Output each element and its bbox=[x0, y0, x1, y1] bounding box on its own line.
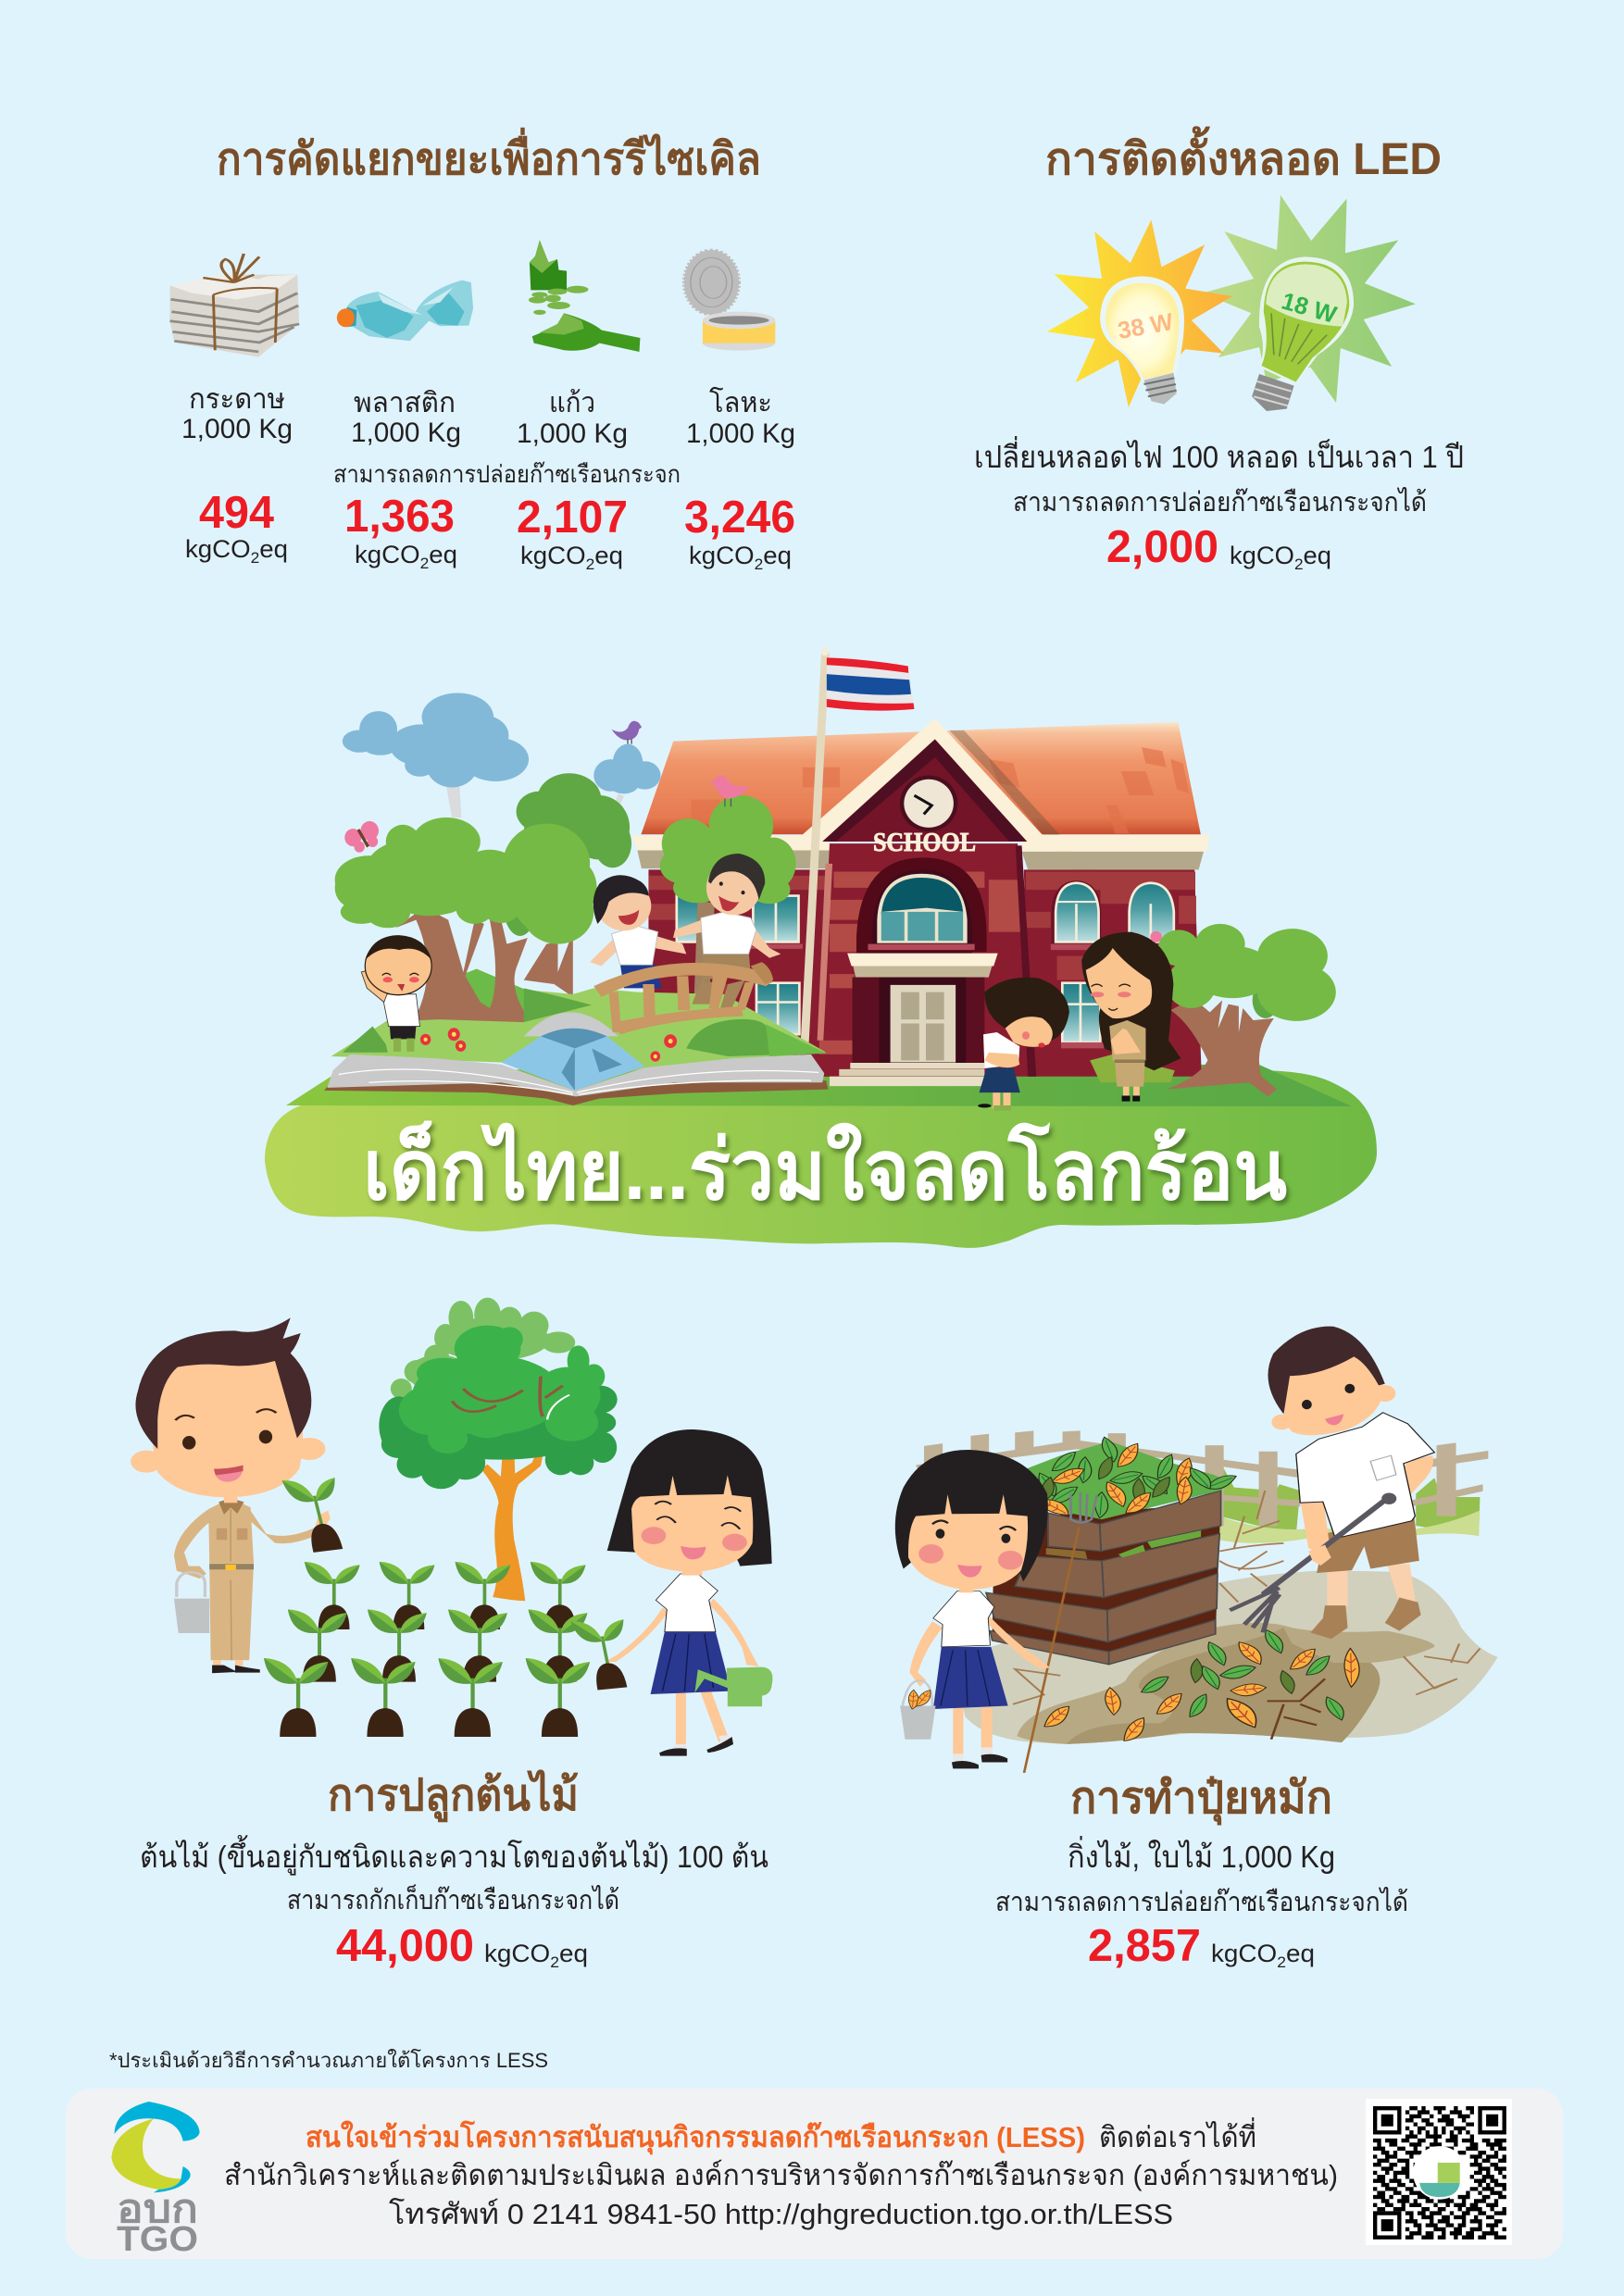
clouds bbox=[343, 693, 661, 817]
heading: tree planting: การปลูกต้นไม้ bbox=[328, 1768, 579, 1823]
icon: yellow 38W bulb bbox=[1047, 219, 1232, 407]
child: girl on bridge bbox=[590, 875, 686, 988]
unit: 2,000: eq bbox=[1304, 542, 1331, 569]
ground and soil bbox=[962, 1570, 1498, 1744]
item: paper: 494 bbox=[199, 488, 274, 538]
caption: carbon storage: สามารถกักเก็บก๊าซเรือนกระจกได้ bbox=[287, 1883, 619, 1915]
item: glass: แก้ว bbox=[549, 388, 595, 418]
caption: recycling reduction: สามารถลดการปล่อยก๊าซเรือนกระจก bbox=[333, 460, 681, 488]
item: glass: eq bbox=[594, 542, 623, 569]
character: girl with pitchfork bbox=[895, 1450, 1097, 1773]
illustration: composting bbox=[895, 1327, 1498, 1773]
footnote: *ประเมินด้วยวิธีการคำนวณภายใต้โครงการ LESS bbox=[109, 2049, 548, 2072]
heading: composting: การทำปุ๋ยหมัก bbox=[1070, 1774, 1332, 1826]
child: bowing girl bbox=[978, 978, 1069, 1111]
icon: crushed plastic bottle bbox=[337, 281, 473, 341]
item: paper: 1,000 Kg bbox=[181, 414, 293, 444]
panel: tree planting bbox=[131, 1298, 772, 1971]
item: paper: 2 bbox=[251, 549, 259, 567]
item: plastic bbox=[344, 388, 461, 572]
item: paper: eq bbox=[259, 535, 288, 563]
text: 100 bulbs one year: เปลี่ยนหลอดไฟ 100 หลอด เป็นเวลา 1 ปี bbox=[974, 436, 1464, 474]
unit: 44,000: kgCO bbox=[484, 1940, 548, 1967]
QR code bbox=[1366, 2099, 1512, 2245]
panel: contact footer bbox=[66, 2089, 1563, 2259]
item: plastic: พลาสติก bbox=[354, 388, 456, 418]
value: 44,000: 44,000 bbox=[336, 1921, 474, 1971]
unit: 44,000: eq bbox=[559, 1940, 588, 1967]
illustration: tree planting bbox=[131, 1298, 772, 1756]
item: glass: kgCO bbox=[520, 542, 584, 569]
banner title: เด็กไทย...ร่วมใจลดโลกร้อน bbox=[363, 1119, 1287, 1217]
fallen leaves bbox=[1041, 1628, 1361, 1744]
text: twigs and leaves: กิ่งไม้, ใบไม้ 1,000 Kg bbox=[1068, 1836, 1335, 1874]
unit: 2,857: kgCO bbox=[1211, 1940, 1275, 1967]
value: 2,857: 2,857 bbox=[1088, 1921, 1201, 1971]
item: metal: 3,246 bbox=[684, 493, 795, 543]
item: plastic: 1,363 bbox=[344, 492, 455, 542]
unit: 2,000: 2 bbox=[1294, 555, 1304, 573]
leaf pile bbox=[1028, 1435, 1239, 1519]
icon: broken glass bottle bbox=[529, 240, 640, 352]
banner blob bbox=[265, 1070, 1377, 1248]
item: metal bbox=[684, 386, 795, 573]
contact line 3: โทรศัพท์ 0 2141 9841-50 http://ghgreduction.tgo.or.th/LESS bbox=[389, 2198, 1173, 2230]
character: teacher with seedling bbox=[131, 1317, 353, 1673]
item: glass: 2 bbox=[586, 555, 594, 573]
item: plastic: eq bbox=[429, 541, 457, 568]
wooden bridge bbox=[593, 962, 773, 1034]
small tree right bbox=[1090, 924, 1336, 1096]
item: metal: โลหะ bbox=[709, 386, 772, 418]
compost bin bbox=[986, 1491, 1221, 1665]
unit: 44,000: 2 bbox=[550, 1953, 559, 1971]
caption: composting reduction: สามารถลดการปล่อยก๊าซเรือนกระจกได้ bbox=[995, 1886, 1408, 1917]
unit: 2,857: 2 bbox=[1277, 1953, 1286, 1971]
school building bbox=[631, 718, 1210, 1086]
item: glass: 1,000 Kg bbox=[517, 418, 628, 449]
item: metal: eq bbox=[763, 542, 792, 569]
ground bbox=[286, 1065, 1352, 1106]
text: 100 trees: ต้นไม้ (ขึ้นอยู่กับชนิดและความโตของต้นไม้) 100 ต้น bbox=[140, 1835, 768, 1876]
item: metal: 1,000 Kg bbox=[686, 418, 795, 449]
logo: TGO bbox=[111, 2102, 200, 2259]
logo: TGO: อบก bbox=[117, 2187, 198, 2230]
icon: paper bundle bbox=[169, 254, 299, 357]
item: plastic: 2 bbox=[420, 555, 429, 572]
branches bbox=[1013, 1491, 1480, 1704]
item: paper bbox=[181, 384, 293, 567]
caption: LED reduction: สามารถลดการปล่อยก๊าซเรือนกระจกได้ bbox=[1013, 486, 1427, 518]
contact line 1: สนใจเข้าร่วมโครงการสนับสนุนกิจกรรมลดก๊าซเรือนกระจก (LESS) bbox=[306, 2120, 1085, 2155]
label: SCHOOL: SCHOOL bbox=[873, 829, 976, 857]
label: 38 W: 38 W bbox=[1116, 307, 1176, 344]
purple bird bbox=[611, 721, 642, 744]
child: boy on bridge bbox=[673, 854, 781, 1008]
item: glass: 2,107 bbox=[517, 493, 628, 543]
item: metal: 2 bbox=[755, 555, 763, 573]
trees behind book bbox=[335, 773, 631, 1030]
logo: TGO: TGO bbox=[117, 2220, 198, 2259]
heading: recycling: การคัดแยกขยะเพื่อการรีไซเคิล bbox=[217, 127, 761, 184]
bridge and children bbox=[361, 854, 781, 1052]
child: boy waving bbox=[361, 935, 431, 1052]
seedling rows bbox=[264, 1562, 590, 1737]
tree bbox=[379, 1298, 618, 1601]
panel: composting bbox=[895, 1327, 1498, 1971]
item: plastic: 1,000 Kg bbox=[351, 418, 461, 448]
panel: recycling bbox=[169, 127, 795, 573]
butterfly bbox=[344, 821, 379, 853]
item: glass bbox=[517, 388, 628, 573]
footer background bbox=[66, 2089, 1563, 2259]
open book bbox=[324, 1054, 828, 1105]
value: 2,000: 2,000 bbox=[1106, 522, 1218, 572]
storybook land bbox=[331, 988, 826, 1091]
contact line 2: สำนักวิเคราะห์และติดตามประเมินผล องค์การบริหารจัดการก๊าซเรือนกระจก (องค์การมหาชน) bbox=[224, 2159, 1338, 2191]
heading: LED: การติดตั้งหลอด LED bbox=[1045, 126, 1442, 184]
icon: opened tin can bbox=[684, 250, 775, 351]
teacher bbox=[1081, 931, 1181, 1102]
item: plastic: kgCO bbox=[355, 541, 418, 568]
item: paper: กระดาษ bbox=[189, 384, 285, 415]
contact line 1: ติดต่อเราได้ที่ bbox=[1099, 2117, 1256, 2153]
character: boy with rake bbox=[1230, 1327, 1434, 1639]
flag and pole bbox=[801, 648, 914, 1042]
fence and grass bbox=[916, 1430, 1488, 1543]
tree by school with pink bird bbox=[660, 776, 796, 1004]
unit: 2,857: eq bbox=[1286, 1940, 1315, 1967]
panel: LED bbox=[974, 126, 1464, 573]
unit: 2,000: kgCO bbox=[1230, 542, 1293, 569]
hero illustration: school and storybook bbox=[265, 648, 1377, 1248]
item: paper: kgCO bbox=[185, 535, 249, 563]
item: metal: kgCO bbox=[689, 542, 753, 569]
character: girl with watering can bbox=[570, 1429, 772, 1756]
label: 18 W: 18 W bbox=[1279, 287, 1340, 329]
icon: green 18W bulb bbox=[1203, 195, 1416, 411]
